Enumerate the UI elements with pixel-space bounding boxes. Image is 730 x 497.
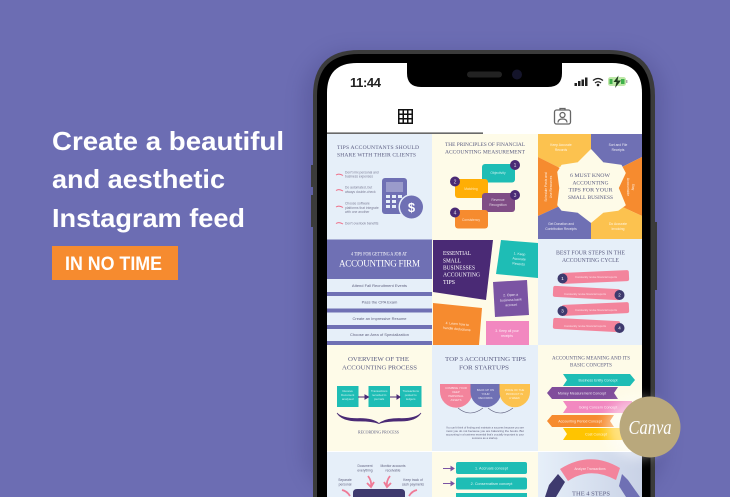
post 6: four steps: [538, 239, 642, 345]
post 5 labels: receipts: [501, 334, 513, 338]
post 3 labels: [544, 143, 635, 231]
post 6: four steps: 2: [618, 292, 621, 298]
post 5 title: BUSINESSES: [443, 266, 475, 272]
canva badge: Canva: [628, 417, 672, 439]
post 8 connectors: [458, 408, 513, 413]
post 2 boxes: Consistency: [462, 218, 480, 222]
phone side buttons: [311, 165, 657, 290]
post 9 banner text: [558, 378, 617, 436]
post 5 labels: handle deductions: [443, 326, 471, 332]
post 1 list: always double-check: [345, 190, 376, 194]
post 12 ring label: Analyze Transactions: [574, 467, 606, 471]
post 7: overview process: Receive: [342, 389, 353, 393]
post 1 list: Don't mix personal and: [345, 170, 379, 174]
post 3 labels: Stay: [631, 184, 635, 191]
post 8 title: [445, 356, 527, 372]
post 10 labels: everything: [357, 468, 373, 472]
post 3 labels: Invoicing: [611, 227, 625, 231]
post 3 centre title: SMALL BUSINESS: [568, 195, 613, 201]
post 5 labels: [443, 251, 526, 338]
post 8 half circles: [440, 384, 530, 408]
post 8 paragraph: You can't think of finding and maintain a success because you are: [446, 426, 524, 430]
post 2 boxes: 2: [454, 180, 457, 186]
post 9 banner text: Business Entity Concept: [579, 378, 617, 382]
post 4 list: Pass the CPA Exam: [362, 300, 398, 304]
post 3 centre shape: [558, 150, 625, 222]
post 1 list: Do automated, but: [345, 186, 372, 190]
post 7: overview process: [327, 345, 432, 451]
post 7 caption: RECORDING PROCESS: [358, 430, 399, 434]
post 6 bar text: [564, 275, 618, 328]
headline: [52, 126, 284, 233]
post 11 bar text: 2. Conservatism concept: [471, 482, 513, 486]
post 6 title: ACCOUNTING CYCLE: [562, 258, 619, 264]
post 8 circle text: BACK UP ON: [477, 388, 494, 392]
post 2 boxes: 3: [514, 193, 517, 199]
post 4 header: [327, 240, 432, 279]
post 7: overview process: Document: [341, 393, 354, 397]
post 3 labels: Sort and File: [609, 143, 628, 147]
post 7 title: ACCOUNTING PROCESS: [342, 364, 418, 372]
post 10 labels: Keep track of: [403, 478, 423, 482]
screen: [327, 63, 642, 497]
post 4: accounting firm: [327, 239, 432, 345]
post 1 list: Don't overlook benefits: [345, 222, 379, 226]
post 3 labels: Records: [555, 148, 567, 152]
post 1 list: business expenses: [345, 174, 373, 178]
post 4 title: [339, 252, 420, 268]
post 8 circle text: A WEEK: [509, 396, 520, 400]
tab icon: grid: [398, 109, 413, 124]
post 12: the 4 steps: [538, 452, 642, 497]
post 10 labels: Monitor accounts: [380, 464, 406, 468]
post 1 list: platforms that integrate: [345, 206, 379, 210]
post 5 labels: 2. Open a: [503, 293, 518, 297]
post 7: overview process: Transactions: [371, 389, 388, 393]
post 4 title: 4 TIPS FOR GETTING A JOB AT: [351, 252, 407, 258]
post 7: overview process: recorded in: [372, 393, 387, 397]
post 5 title: TIPS: [443, 280, 455, 286]
post 7: overview process: journals: [373, 397, 385, 401]
post 1 title: TIPS ACCOUNTANTS SHOULD: [337, 145, 419, 151]
post 4 list: Attend Fall Recruitment Events: [352, 283, 407, 288]
canva badge: [620, 396, 680, 458]
post 7 boxes: [337, 386, 422, 407]
post 6: four steps: 4: [618, 326, 621, 330]
post 8 circle text: RECORDS: [478, 396, 493, 400]
post 7 title: [342, 357, 417, 370]
post 8 circle text: [445, 386, 524, 402]
post 9 banners: [547, 374, 635, 440]
post 2 boxes: 1: [514, 163, 517, 169]
headline: Create a beautiful: [52, 126, 284, 156]
post 1 list: [336, 170, 379, 226]
post 5 title: ESSENTIAL: [443, 251, 471, 257]
post 5 shapes: [433, 240, 538, 345]
badge: in no time: [52, 246, 178, 280]
post 6 bar text: Constantly revise financial reports: [564, 324, 607, 328]
post 8 title: FOR STARTUPS: [459, 364, 510, 372]
phone: [311, 50, 657, 497]
badge: in no time: IN NO TIME: [65, 254, 162, 275]
post 9 title: BASIC CONCEPTS: [570, 364, 612, 368]
post 5 title: SMALL: [443, 258, 461, 264]
post 7 title: OVERVIEW OF THE: [348, 356, 409, 363]
post 7: overview process: posted to: [405, 393, 417, 397]
phone shadow: [303, 50, 665, 497]
post 3 labels: Use Resources: [549, 175, 553, 198]
post 10 labels: cash payments: [402, 482, 424, 486]
post 9 banner text: Accounting Period Concept: [558, 420, 602, 424]
post 12 ring: [545, 459, 640, 497]
post 8 circle text: ASSETS: [450, 398, 462, 402]
post 3 centre title: TIPS FOR YOUR: [568, 188, 613, 194]
post 3 centre title: ACCOUNTING: [572, 180, 609, 186]
post 5 labels: Records: [512, 261, 525, 267]
post 2 title: ACCOUNTING MEASUREMENT: [445, 150, 526, 156]
post 2 boxes: Matching: [464, 187, 478, 191]
post 6 bar text: Constantly revise financial reports: [575, 308, 618, 312]
headline: Instagram feed: [52, 203, 245, 233]
active tab underline: [327, 132, 483, 134]
post 10 labels: Document: [357, 464, 373, 468]
post 2 boxes: 4: [454, 210, 457, 216]
post 2 boxes: Revenue: [491, 198, 505, 202]
post 6 circles: [558, 274, 624, 333]
post 9 banner text: Money Measurement Concept: [558, 392, 606, 396]
post 4 title: ACCOUNTING FIRM: [339, 258, 420, 268]
post 11: concepts list: [432, 452, 538, 497]
post 5 labels: 3. Keep all your: [495, 329, 520, 333]
post 6 title: [556, 250, 625, 262]
post 6 bars: [553, 270, 629, 332]
post 5 title: ACCOUNTING: [443, 272, 480, 278]
icon: calculator with coin: $: [408, 200, 416, 215]
post 1: tips accountants: [327, 134, 432, 239]
headline: and aesthetic: [52, 164, 225, 194]
post 5 labels: 4. Learn how to: [445, 321, 469, 327]
post 3 labels: Receipts: [612, 148, 625, 152]
post 11 bars: [456, 462, 527, 497]
post 9: meaning and concepts: [538, 345, 642, 451]
post 5 labels: account: [505, 303, 517, 307]
post 10 labels: [338, 464, 424, 486]
post 4 list: Create an Impressive Resume: [352, 316, 407, 321]
post 5 labels: Accurate: [512, 256, 526, 262]
post 8 circle text: COMBINE YOUR: [445, 386, 467, 390]
post 2 boxes: Objectivity: [490, 171, 506, 175]
post 3 labels: Do Accurate: [609, 222, 627, 226]
post 7 brace: [337, 413, 421, 424]
post 5 title: [443, 251, 480, 286]
post 9 banner text: Going Concern Concept: [579, 406, 617, 410]
post 10 arrows: [342, 476, 417, 496]
post 8 circle text: PRICE OF THE: [505, 388, 524, 392]
post 8 circle text: PERSONAL: [448, 394, 464, 398]
post 7: overview process: ledgers: [406, 397, 416, 401]
post 10 labels: receivable: [385, 468, 401, 472]
post 5 labels: business bank: [500, 297, 522, 303]
post 9 title: ACCOUNTING MEANING AND ITS: [552, 356, 630, 362]
post 6 title: BEST FOUR STEPS IN THE: [556, 250, 625, 256]
post 4 list: Choose an Area of Specialization: [350, 332, 409, 337]
post 3 labels: Contribution Receipts: [545, 227, 577, 231]
post 11 bar text: [471, 466, 513, 486]
post 6 bar text: Constantly revise financial reports: [575, 275, 618, 279]
canva shadow: [606, 398, 666, 458]
post 9 banner text: Cost Concept: [585, 432, 607, 436]
post 8 circle text: PRODUCT IN: [506, 392, 523, 396]
post 8 paragraph: success as a startup.: [472, 436, 498, 440]
post 9 title: [552, 356, 630, 368]
post 2 boxes: [450, 160, 520, 228]
post 11 arrows: [443, 466, 454, 486]
post 8: top 3 tips: [432, 345, 538, 451]
post 1 title: SHARE WITH THEIR CLIENTS: [337, 152, 416, 158]
post 2 title: [445, 142, 525, 154]
post 4 list: [350, 283, 409, 337]
post 10 labels: personal: [339, 482, 352, 486]
post 7 arrows: [358, 395, 400, 399]
phone body: [313, 50, 655, 497]
post 10 box: [353, 489, 405, 497]
post 5 labels: 1. Keep: [514, 252, 526, 257]
post 2 boxes: Recognition: [489, 203, 507, 207]
post 3: six must know: [538, 134, 642, 239]
post 2: principles: [432, 134, 538, 239]
post 3 labels: Keep Accurate: [550, 143, 572, 147]
post 7: overview process: analysed: [342, 397, 354, 401]
post 10 labels: Separate: [338, 478, 352, 482]
post 8 paragraph: [446, 426, 524, 440]
post 3 centre title: 6 MUST KNOW: [570, 173, 610, 179]
post 3 segments: [538, 134, 642, 239]
post 1 list: with one another: [345, 210, 370, 214]
post 3 labels: Accountable: [626, 178, 630, 196]
post 8 circle text: YOUR: [481, 392, 490, 396]
post 6 bar text: Constantly revise financial reports: [564, 292, 607, 296]
post 10: process: [327, 452, 432, 497]
post 1 list: Choose software: [345, 202, 370, 206]
post 11 bar text: 1. Accruals concept: [475, 466, 509, 470]
post 6: four steps: 1: [561, 276, 564, 281]
status icons: [574, 76, 627, 88]
post 8 circle text: KEEP: [452, 390, 460, 394]
post 8 title: TOP 3 ACCOUNTING TIPS: [445, 356, 527, 363]
post 2 title: THE PRINCIPLES OF FINANCIAL: [445, 142, 525, 148]
post 8 paragraph: most you do not because you are balancing the books. But: [446, 429, 524, 433]
tab icon: tagged: [554, 108, 570, 124]
notch: [407, 63, 562, 87]
status time: 11:44: [350, 75, 382, 90]
post 3 centre title: [568, 173, 613, 201]
post 4 stripes: [327, 292, 432, 345]
post 8 paragraph: accounting in a business essential that's crucially important to your: [446, 432, 524, 436]
post 7: overview process: Transactions: [402, 389, 419, 393]
post 6: four steps: 3: [561, 308, 564, 314]
post 1 title: [337, 146, 419, 156]
post 3 labels: Schedule Posts and: [544, 172, 548, 202]
post 3 labels: Get Donation and: [548, 222, 574, 226]
post 5: essential tips: [432, 239, 538, 345]
